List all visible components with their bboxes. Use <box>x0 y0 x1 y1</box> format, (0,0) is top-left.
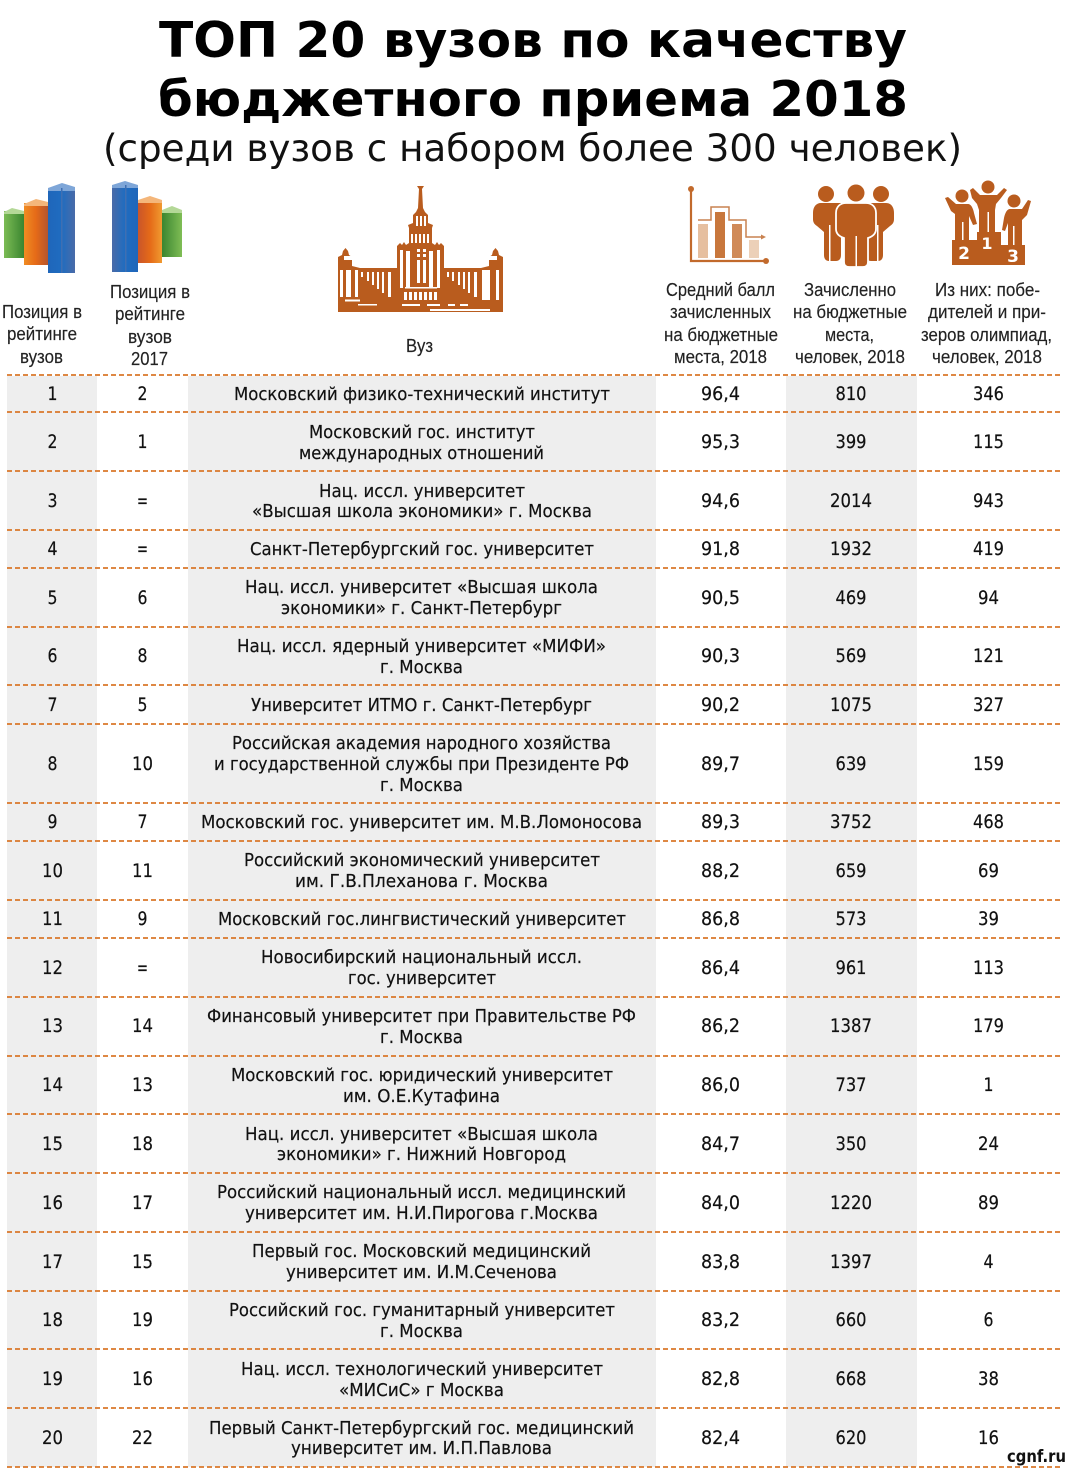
row 1: 96,4 <box>701 384 740 405</box>
row 12: Новосибирский национальный иссл. <box>261 947 582 968</box>
row 19: 16 <box>132 1369 153 1390</box>
row 7: 5 <box>138 695 148 716</box>
row 2: 399 <box>836 432 866 453</box>
row 13: 13 <box>42 1016 63 1037</box>
row 11: 11 <box>42 909 63 930</box>
icon: podium with winners: 2 <box>958 244 970 264</box>
row 13: 86,2 <box>701 1016 740 1037</box>
row 18: г. Москва <box>380 1321 463 1342</box>
row 4: 91,8 <box>701 539 740 560</box>
row 13: г. Москва <box>380 1027 463 1048</box>
row 3: 943 <box>973 491 1004 512</box>
row 5 <box>48 577 999 619</box>
row 8: 89,7 <box>701 754 740 775</box>
row 20: 620 <box>836 1428 866 1449</box>
row 17: 1397 <box>830 1252 872 1273</box>
row 2: 1 <box>138 432 148 453</box>
row 6: 6 <box>48 646 58 667</box>
row 14: 14 <box>42 1075 63 1096</box>
row 13 <box>42 1006 1004 1048</box>
row 3: 3 <box>48 491 58 512</box>
row 16: 17 <box>132 1193 153 1214</box>
header: olympiad winners: человек, 2018 <box>932 347 1042 367</box>
row 3: «Высшая школа экономики» г. Москва <box>252 501 592 522</box>
row 18: 6 <box>984 1310 994 1331</box>
row 5: 6 <box>138 588 148 609</box>
row 14: Московский гос. юридический университет <box>231 1065 613 1086</box>
header: enrolled: Зачисленно <box>804 280 896 300</box>
row 1: Московский физико-технический институт <box>234 384 610 405</box>
row 10: им. Г.В.Плеханова г. Москва <box>295 871 548 892</box>
row 9: 9 <box>48 812 58 833</box>
row 18: 83,2 <box>701 1310 740 1331</box>
header: enrolled: на бюджетные <box>793 302 907 322</box>
row 8 <box>48 733 1004 796</box>
header: current position: рейтинге <box>7 324 77 344</box>
row 6: 90,3 <box>701 646 740 667</box>
row 4 <box>48 539 1004 560</box>
row 6: Нац. иссл. ядерный университет «МИФИ» <box>237 636 606 657</box>
header: 2017 position: рейтинге <box>115 304 185 324</box>
row 1: 1 <box>48 384 58 405</box>
row 15: 18 <box>132 1134 153 1155</box>
row 14: 1 <box>984 1075 994 1096</box>
row 11: 9 <box>138 909 148 930</box>
row 6: 121 <box>973 646 1004 667</box>
row 16: Российский национальный иссл. медицинский <box>217 1182 626 1203</box>
title: бюджетного приема 2018 <box>158 71 908 128</box>
header: 2017 position: вузов <box>128 327 172 347</box>
row 6: 8 <box>138 646 148 667</box>
row 18: 19 <box>132 1310 153 1331</box>
row 11: 573 <box>836 909 866 930</box>
row 4: 1932 <box>830 539 872 560</box>
row 7: 1075 <box>830 695 872 716</box>
row 20: 16 <box>978 1428 999 1449</box>
row 10: 88,2 <box>701 861 740 882</box>
row 3: 94,6 <box>701 491 740 512</box>
header: enrolled: человек, 2018 <box>795 347 905 367</box>
title: ТОП 20 вузов по качеству <box>159 12 907 69</box>
row 13: Финансовый университет при Правительстве РФ <box>207 1006 636 1027</box>
row 9: 468 <box>973 812 1004 833</box>
icon: university building <box>338 186 503 312</box>
row 20: университет им. И.П.Павлова <box>291 1438 552 1459</box>
row 4: Санкт-Петербургский гос. университет <box>250 539 594 560</box>
row 15: 15 <box>42 1134 63 1155</box>
row 12 <box>42 947 1004 989</box>
row 5: экономики» г. Санкт-Петербург <box>281 598 562 619</box>
row 14 <box>42 1065 994 1107</box>
row 2: 95,3 <box>701 432 740 453</box>
row 19 <box>42 1359 999 1401</box>
row 13: 1387 <box>830 1016 872 1037</box>
row 2: Московский гос. институт <box>309 422 535 443</box>
row 9: Московский гос. университет им. М.В.Ломоносова <box>201 812 642 833</box>
row 7: 7 <box>48 695 58 716</box>
row 5: 90,5 <box>701 588 740 609</box>
row 10: 659 <box>836 861 866 882</box>
header: olympiad winners: дителей и при- <box>928 302 1046 322</box>
row 2 <box>48 422 1004 464</box>
row 2: международных отношений <box>299 443 544 464</box>
row 5: 469 <box>836 588 866 609</box>
row 2: 2 <box>48 432 58 453</box>
row 10 <box>42 850 999 892</box>
row 11: 86,8 <box>701 909 740 930</box>
row 4: = <box>137 539 148 560</box>
row 12: = <box>137 958 148 979</box>
row 20: 82,4 <box>701 1428 740 1449</box>
row 15 <box>42 1124 999 1165</box>
header: university: Вуз <box>406 336 433 356</box>
icon: podium with winners: 3 <box>1007 247 1019 267</box>
row 7 <box>48 695 1004 716</box>
header: current position: Позиция в <box>2 302 82 322</box>
row 3 <box>48 481 1004 522</box>
column shading <box>7 376 917 1467</box>
header: olympiad winners: зеров олимпиад, <box>921 325 1052 345</box>
row 18 <box>42 1300 994 1342</box>
row 19: Нац. иссл. технологический университет <box>241 1359 603 1380</box>
row 1: 2 <box>138 384 148 405</box>
row 9 <box>48 812 1004 833</box>
icon: group of people <box>813 184 894 268</box>
row 13: 179 <box>973 1016 1004 1037</box>
row 18: 18 <box>42 1310 63 1331</box>
row 7: 327 <box>973 695 1004 716</box>
row 16: 16 <box>42 1193 63 1214</box>
icon: podium with winners <box>945 180 1031 267</box>
row 8: Российская академия народного хозяйства <box>232 733 611 754</box>
row 17: 17 <box>42 1252 63 1273</box>
row 15: Нац. иссл. университет «Высшая школа <box>245 1124 598 1145</box>
header: olympiad winners: Из них: побе- <box>935 280 1040 300</box>
row 1 <box>48 384 1004 405</box>
row 9: 3752 <box>830 812 872 833</box>
subtitle: (среди вузов с набором более 300 человек) <box>103 127 962 170</box>
row 19: 19 <box>42 1369 63 1390</box>
row 11 <box>42 909 999 930</box>
row 14: 737 <box>836 1075 866 1096</box>
icon: bar chart, current position <box>4 183 75 273</box>
icon: bar chart, 2017 position <box>112 181 182 272</box>
row 10: Российский экономический университет <box>244 850 600 871</box>
row 11: Московский гос.лингвистический университет <box>218 909 626 930</box>
row 14: 13 <box>132 1075 153 1096</box>
row 8: 8 <box>48 754 58 775</box>
table row separators <box>7 375 1060 1467</box>
row 16: университет им. Н.И.Пирогова г.Москва <box>245 1203 598 1224</box>
row 20: 20 <box>42 1428 63 1449</box>
row 4: 419 <box>973 539 1004 560</box>
row 5: 94 <box>978 588 999 609</box>
row 17: 15 <box>132 1252 153 1273</box>
row 9: 89,3 <box>701 812 740 833</box>
row 3: = <box>137 491 148 512</box>
row 6: г. Москва <box>380 657 463 678</box>
row 16 <box>42 1182 999 1224</box>
row 7: Университет ИТМО г. Санкт-Петербург <box>251 695 592 716</box>
icon: line and bar chart <box>688 186 769 264</box>
row 8: 639 <box>836 754 866 775</box>
row 12: 961 <box>836 958 866 979</box>
row 3: Нац. иссл. университет <box>319 481 525 502</box>
row 19: 82,8 <box>701 1369 740 1390</box>
icon: podium with winners: 1 <box>981 234 993 253</box>
row 7: 90,2 <box>701 695 740 716</box>
row 15: 84,7 <box>701 1134 740 1155</box>
row 17: 4 <box>984 1252 994 1273</box>
row 5: Нац. иссл. университет «Высшая школа <box>245 577 598 598</box>
row 10: 11 <box>132 861 153 882</box>
header: average score: на бюджетные <box>664 325 778 345</box>
row 16: 89 <box>978 1193 999 1214</box>
header: average score: зачисленных <box>670 302 771 322</box>
header: 2017 position <box>110 282 190 369</box>
header: 2017 position: Позиция в <box>110 282 190 302</box>
row 8: 159 <box>973 754 1004 775</box>
row 20 <box>42 1418 999 1459</box>
row 9: 7 <box>138 812 148 833</box>
source credit: cgnf.ru <box>1007 1447 1066 1467</box>
row 8: г. Москва <box>380 775 463 796</box>
row 19: «МИСиС» г Москва <box>339 1380 504 1401</box>
row 1: 346 <box>973 384 1004 405</box>
row 17: 83,8 <box>701 1252 740 1273</box>
row 4: 4 <box>48 539 58 560</box>
header: current position <box>2 302 82 367</box>
header: enrolled <box>793 280 907 367</box>
row 17: Первый гос. Московский медицинский <box>252 1241 591 1262</box>
row 18: Российский гос. гуманитарный университет <box>229 1300 615 1321</box>
row 16: 84,0 <box>701 1193 740 1214</box>
row 13: 14 <box>132 1016 153 1037</box>
header: average score: места, 2018 <box>674 347 767 367</box>
row 19: 38 <box>978 1369 999 1390</box>
header: enrolled: места, <box>825 325 874 345</box>
row 16: 1220 <box>830 1193 872 1214</box>
row 2: 115 <box>973 432 1004 453</box>
row 6 <box>48 636 1004 678</box>
row 14: им. О.Е.Кутафина <box>343 1086 500 1107</box>
header: average score: Средний балл <box>666 280 775 300</box>
header: olympiad winners <box>921 280 1052 367</box>
row 20: 22 <box>132 1428 153 1449</box>
row 12: гос. университет <box>348 968 496 989</box>
row 8: и государственной службы при Президенте РФ <box>214 754 629 775</box>
row 17: университет им. И.М.Сеченова <box>286 1262 557 1283</box>
row 17 <box>42 1241 994 1283</box>
row 5: 5 <box>48 588 58 609</box>
row 15: экономики» г. Нижний Новгород <box>277 1144 566 1165</box>
row 14: 86,0 <box>701 1075 740 1096</box>
row 18: 660 <box>836 1310 866 1331</box>
row 1: 810 <box>836 384 866 405</box>
row 12: 113 <box>973 958 1004 979</box>
header: average score <box>664 280 778 367</box>
row 10: 69 <box>978 861 999 882</box>
row 10: 10 <box>42 861 63 882</box>
header: 2017 position: 2017 <box>131 349 168 369</box>
row 12: 12 <box>42 958 63 979</box>
row 8: 10 <box>132 754 153 775</box>
row 12: 86,4 <box>701 958 740 979</box>
row 3: 2014 <box>830 491 872 512</box>
row 11: 39 <box>978 909 999 930</box>
row 20: Первый Санкт-Петербургский гос. медицинский <box>209 1418 634 1439</box>
title <box>158 12 908 128</box>
header: current position: вузов <box>20 347 63 367</box>
row 15: 24 <box>978 1134 999 1155</box>
row 19: 668 <box>836 1369 866 1390</box>
row 15: 350 <box>836 1134 866 1155</box>
row 6: 569 <box>836 646 866 667</box>
